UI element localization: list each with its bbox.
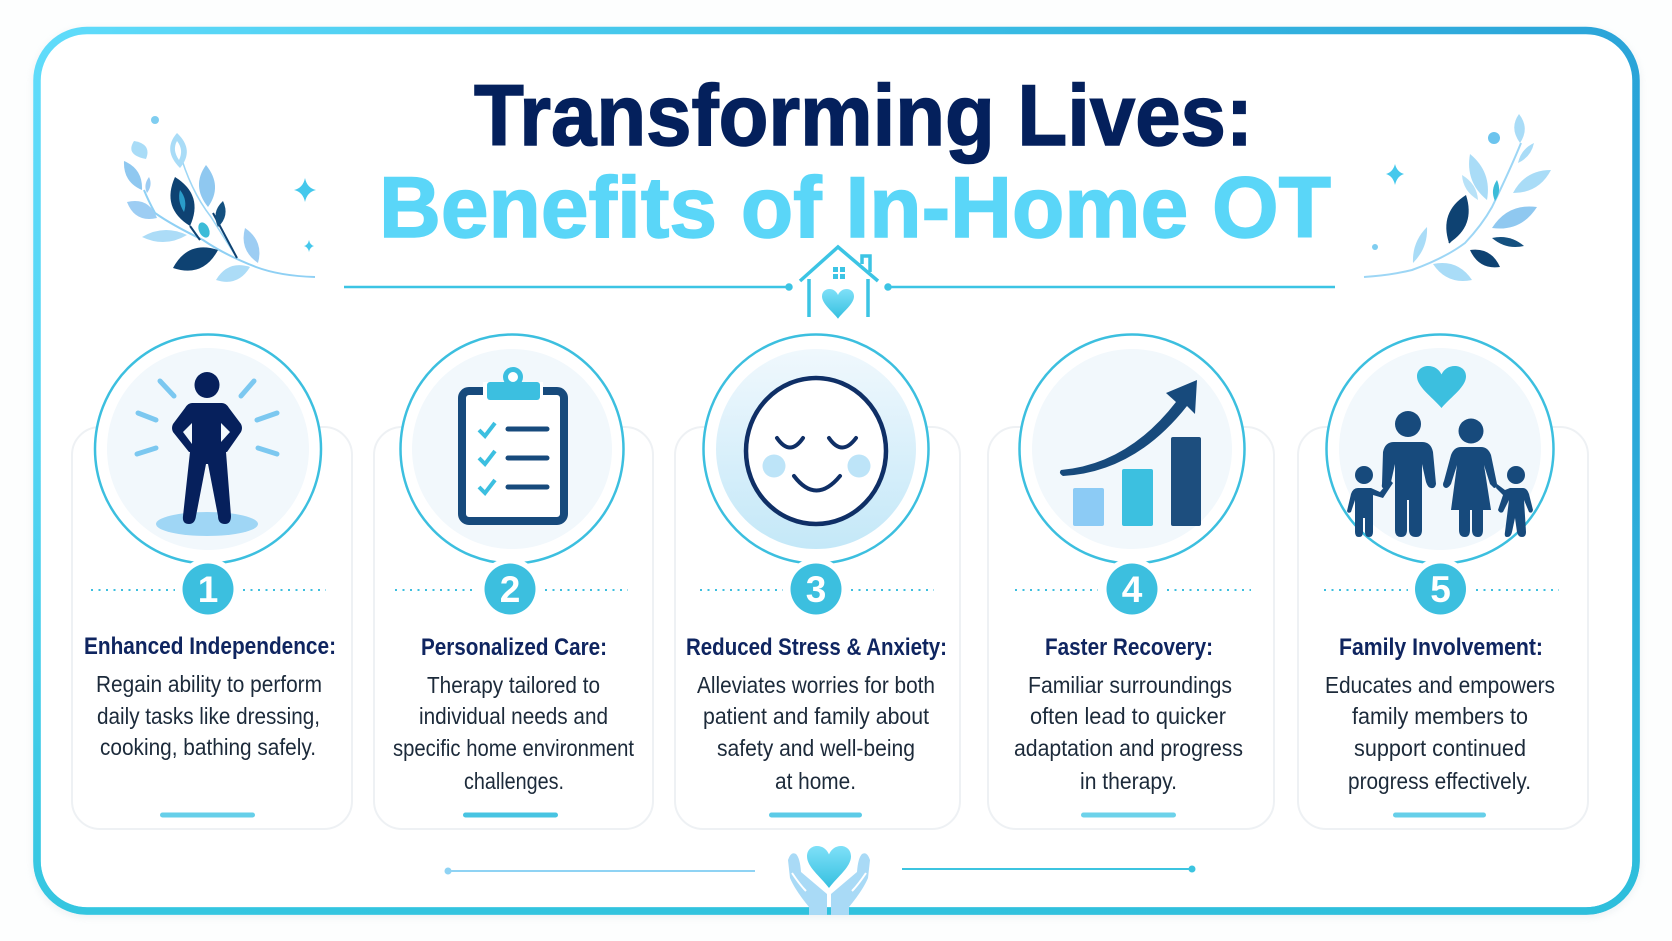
heading: Family Involvement: [1339, 634, 1543, 661]
title: Transforming Lives: [474, 68, 1253, 164]
body text: Educates and empowers [1325, 672, 1555, 698]
number badge 3 [790, 564, 842, 614]
body text: support continued [1354, 735, 1526, 761]
left sparkles [294, 178, 316, 252]
heading: Enhanced Independence: [84, 633, 336, 660]
bottom divider lines [444, 866, 1196, 874]
number badge 1: 1 [198, 569, 218, 610]
body text: cooking, bathing safely. [100, 734, 316, 760]
right sparkles [1372, 164, 1404, 250]
number badge 4 [1106, 564, 1158, 614]
body text [393, 672, 635, 794]
heading: Personalized Care: [421, 634, 607, 661]
heading: Faster Recovery: [1045, 634, 1213, 661]
number badge 5: 5 [1430, 569, 1451, 610]
body text: adaptation and progress [1014, 735, 1243, 761]
body text: daily tasks like dressing, [97, 703, 320, 729]
body text: safety and well-being [717, 735, 915, 761]
body text [1325, 672, 1555, 794]
icon: family with heart [1326, 334, 1554, 564]
icon: standing person [95, 334, 321, 564]
number badge 1 [182, 564, 234, 614]
panel: personalized care [374, 334, 653, 829]
body text: specific home environment [393, 735, 635, 761]
heading: Reduced Stress & Anxiety: [686, 634, 947, 661]
icon: clipboard checklist [400, 334, 624, 564]
body text: progress effectively. [1348, 768, 1531, 794]
panel: family involvement [1298, 334, 1588, 829]
card 5 background [1298, 427, 1588, 829]
title [379, 68, 1331, 256]
card 4 background [988, 427, 1274, 829]
body text: Familiar surroundings [1028, 672, 1232, 698]
number badge 2 [484, 564, 536, 614]
card 3 background [675, 427, 960, 829]
icon: house with heart [800, 247, 878, 319]
body text: individual needs and [419, 703, 608, 729]
panel: enhanced independence [72, 334, 352, 829]
body text: often lead to quicker [1030, 703, 1226, 729]
number badge 4: 4 [1122, 569, 1143, 610]
body text [96, 671, 322, 760]
card 2 background [374, 427, 653, 829]
title: Benefits of In-Home OT [379, 160, 1331, 256]
body text [697, 672, 935, 794]
icon: hands holding heart [788, 846, 870, 915]
panel: faster recovery [988, 334, 1274, 829]
number badge 5 [1415, 564, 1466, 614]
body text: challenges. [464, 768, 564, 794]
body text: Therapy tailored to [427, 672, 600, 698]
body text: family members to [1352, 703, 1528, 729]
body text: patient and family about [703, 703, 930, 729]
number badge 3: 3 [806, 569, 826, 610]
right leaf spray [1364, 114, 1551, 281]
icon: calm smiling face [704, 334, 928, 564]
body text: Alleviates worries for both [697, 672, 935, 698]
body text: at home. [775, 768, 856, 794]
title divider lines [344, 284, 1335, 290]
card 1 background [72, 427, 352, 829]
body text [1014, 672, 1243, 794]
left leaf spray [124, 116, 315, 282]
icon: rising bar chart with arrow [1020, 334, 1244, 564]
number badge 2: 2 [500, 569, 520, 610]
panel: reduced stress and anxiety [675, 334, 960, 829]
body text: in therapy. [1080, 768, 1177, 794]
body text: Regain ability to perform [96, 671, 322, 697]
